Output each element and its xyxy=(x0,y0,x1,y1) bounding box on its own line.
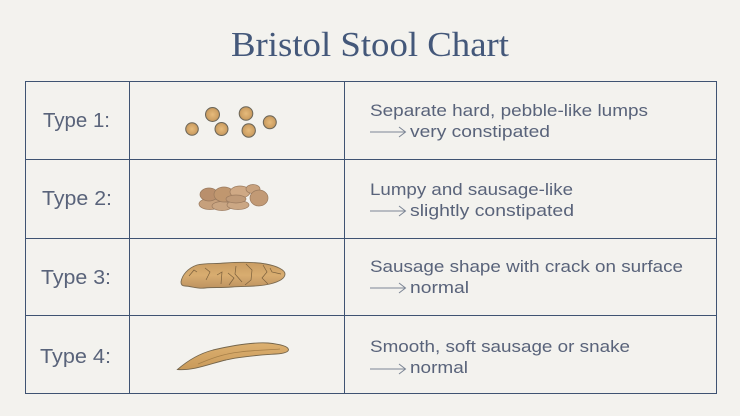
description: type 2: slightly constipated xyxy=(410,201,574,220)
row label: Type 2: Type 2: xyxy=(42,188,112,210)
description: type 4: Smooth, soft sausage or snake xyxy=(370,337,630,356)
row label: Type 3: Type 3: xyxy=(41,267,111,289)
row label: Type 1: Type 1: xyxy=(43,110,110,132)
illustration: type 2 lumpy sausage xyxy=(199,184,268,210)
description: type 4 xyxy=(370,337,630,377)
illustration: type 3 cracked sausage xyxy=(181,262,285,288)
description: type 3: Sausage shape with crack on surface xyxy=(370,257,683,276)
illustration: type 4 smooth sausage xyxy=(178,343,288,370)
description: type 3: normal xyxy=(410,278,469,297)
description: type 1: very constipated xyxy=(410,122,550,141)
title: Bristol Stool Chart xyxy=(231,25,509,64)
arrow: type 2 xyxy=(370,206,406,216)
arrow: type 1 xyxy=(370,127,406,137)
description: type 2: Lumpy and sausage-like xyxy=(370,180,573,199)
illustration: type 1 pebbles xyxy=(186,107,276,137)
description: type 3 xyxy=(370,257,683,297)
description: type 2 xyxy=(370,180,574,220)
arrow: type 4 xyxy=(370,364,406,374)
description: type 1: Separate hard, pebble-like lumps xyxy=(370,101,648,120)
arrow: type 3 xyxy=(370,283,406,293)
description: type 4: normal xyxy=(410,358,468,377)
table grid xyxy=(25,81,717,394)
description: type 1 xyxy=(370,101,648,141)
row label: Type 4: Type 4: xyxy=(40,346,111,368)
